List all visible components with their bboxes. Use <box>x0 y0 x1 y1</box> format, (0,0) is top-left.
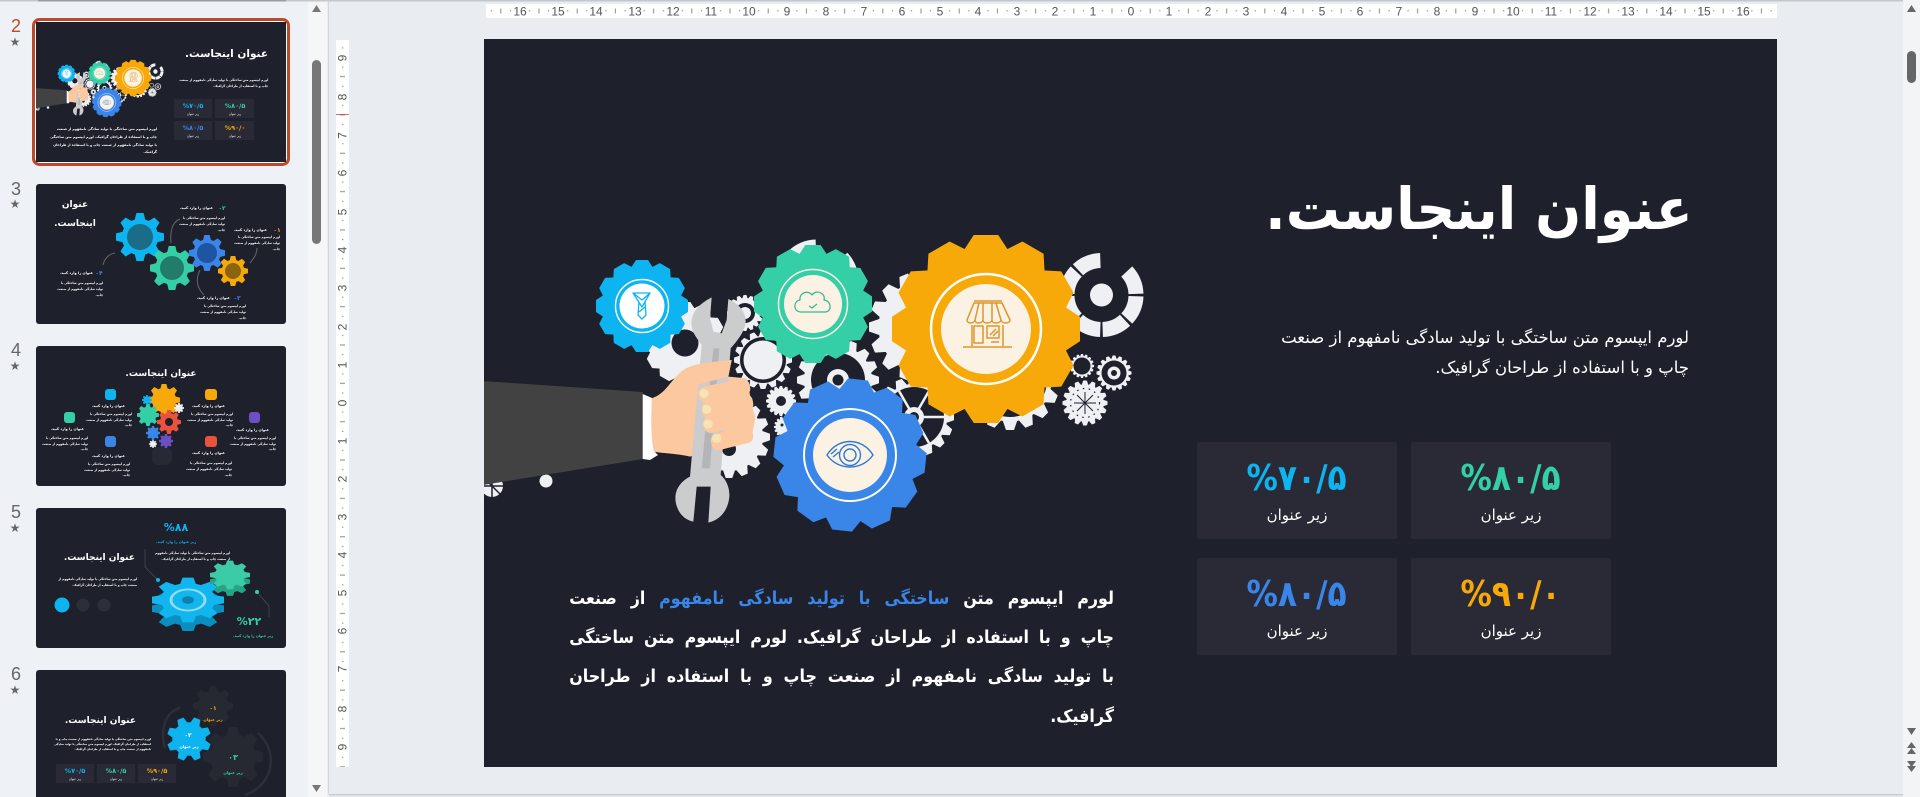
thumbnail: slide 4: عنوان را وارد کنید.‏ <box>92 404 126 408</box>
thumbnail: slide 4: تولید سادگی نامفهوم از صنعت <box>187 418 233 422</box>
thumbnail: slide 6: ۰۱ <box>209 705 217 712</box>
thumbnail: slide 4: لورم ایپسوم متن ساختگی با <box>191 412 233 416</box>
thumbnail: slide 3: عنوان را وارد کنید.‏ <box>197 296 231 300</box>
thumbnail: slide 6: استفاده از طراحان گرافیک. لورم ایپسوم متن ساختگی با تولید سادگی <box>54 742 151 746</box>
top ruler: 4 <box>975 4 982 18</box>
white spoked gear <box>874 377 954 457</box>
left ruler: 5 <box>336 208 350 215</box>
top ruler: 14 <box>1659 4 1673 18</box>
thumbnail: slide 5: از صنعت چاپ و با استفاده از طراحان گرافیک.‏ <box>161 557 230 561</box>
star mark 2: ★ <box>10 35 20 49</box>
top ruler: 5 <box>1319 4 1326 18</box>
top ruler: 6 <box>899 4 906 18</box>
top ruler: 12 <box>666 4 680 18</box>
thumbnail: slide 4 <box>36 346 286 486</box>
stat card: blue: زیر عنوان <box>1267 622 1327 640</box>
thumbnail: slide 6: %۷۰/۵ <box>65 767 85 775</box>
thumbnail: slide 2 selected: %۸۰/۵ <box>225 102 245 110</box>
intro paragraph <box>1281 328 1689 377</box>
small partial gear at arm <box>481 475 503 497</box>
white gear behind fingers <box>688 396 770 478</box>
thumbnail: slide 6: عنوان اینجاست.‏ <box>65 716 136 726</box>
stat card: orange <box>1411 558 1611 655</box>
star mark 5: ★ <box>10 521 20 535</box>
top ruler: 8 <box>1434 4 1441 18</box>
top ruler: 4 <box>1281 4 1288 18</box>
white dashed ring gear top right <box>1066 259 1137 331</box>
thumbnail: slide 4: عنوان را وارد کنید.‏ <box>236 428 270 432</box>
left ruler: 7 <box>336 665 350 672</box>
slide number 2: 2 <box>11 16 21 36</box>
star mark 4: ★ <box>10 359 20 373</box>
thumbnail: slide 2 selected: %۷۰/۵ <box>183 102 203 110</box>
thumbnail: slide 3: تولید سادگی نامفهوم از صنعت <box>57 287 103 291</box>
stat card: orange: زیر عنوان <box>1481 622 1541 640</box>
thumbnail: slide 5: لورم ایپسوم متن ساختگی با تولید سادگی نامفهوم <box>155 551 230 555</box>
thumbnail: slide 6: زیر عنوان <box>203 717 223 722</box>
thumbnail: slide 6: %۹۰/۵ <box>147 767 167 775</box>
thumbnail: slide 2 selected: %۹۰/۰ <box>225 124 245 132</box>
slide number 4: 4 <box>11 340 21 360</box>
thumbnail: slide 2 selected: زیر عنوان <box>187 134 200 138</box>
left ruler: 5 <box>336 589 350 596</box>
orange gear with shop icon <box>890 233 1082 425</box>
top ruler: 1 <box>1166 4 1173 18</box>
thumbnail: slide 3: چاپ.‏ <box>273 247 280 251</box>
white gear behind orange gear <box>869 271 981 383</box>
top ruler: 15 <box>551 4 565 18</box>
thumbnail: slide 5: زیر عنوان را وارد کنید.‏ <box>156 540 196 544</box>
icon: necktie <box>633 293 650 319</box>
top ruler: 9 <box>1472 4 1479 18</box>
thumbnail: slide 4: تولید سادگی نامفهوم از صنعت <box>186 467 232 471</box>
top ruler: 13 <box>628 4 642 18</box>
top ruler: 1 <box>1090 4 1097 18</box>
body text block: لورم ایپسوم متن ساختگی با تولید سادگی نامفهوم از صنعت <box>569 589 1114 609</box>
thumbnail: slide 6: زیر عنوان <box>223 770 243 775</box>
thumbnail: slide 6: زیر عنوان <box>110 777 123 781</box>
thumbnail: slide 2 selected: لورم ایپسوم متن ساختگی با تولید سادگی نامفهوم از صنعت <box>179 78 268 82</box>
thumbnail: slide 6: ۰۲ <box>184 732 192 739</box>
panel: main slide background <box>484 39 1777 767</box>
thumbnail: slide 2 selected: %۸۰/۵ <box>183 124 203 132</box>
thumbnail: slide 1 edge <box>38 0 286 2</box>
right window scrollbar <box>1907 5 1916 772</box>
white gear behind wrench <box>643 301 727 385</box>
left ruler: 6 <box>336 169 350 176</box>
body text block: چاپ و با استفاده از طراحان گرافیک. لورم ایپسوم متن ساختگی <box>569 628 1114 648</box>
title: عنوان اینجاست. <box>1266 175 1693 243</box>
stat card: green: زیر عنوان <box>1481 506 1541 524</box>
icon: cloud <box>795 292 830 312</box>
tiny dotted gear <box>774 416 796 438</box>
thumbnail: slide 6: لورم ایپسوم متن ساختگی با تولید سادگی نامفهوم از صنعت چاپ و با <box>56 737 151 741</box>
thumbnail: slide 2 selected: لورم ایپسوم متن ساختگی با تولید سادگی نامفهوم از صنعت <box>57 126 157 131</box>
thumbnail: slide 4: چاپ.‏ <box>81 447 88 451</box>
thumbnail: slide 3: ۰۴ <box>95 270 103 277</box>
star mark 3: ★ <box>10 197 20 211</box>
thumbnail: slide 2 selected: چاپ و با استفاده از طراحان گرافیک. لورم ایپسوم متن ساختگی <box>50 134 158 139</box>
left ruler: 4 <box>336 551 350 558</box>
white gear with hub <box>797 339 879 421</box>
top ruler: 3 <box>1243 4 1250 18</box>
thumbnail: slide 6: %۸۰/۵ <box>106 767 126 775</box>
thumbnail: slide 3: تولید سادگی نامفهوم از صنعت <box>200 310 246 314</box>
thumbnail: slide 4: تولید سادگی نامفهوم از صنعت <box>230 442 276 446</box>
thumbnail: slide 2 selected: زیر عنوان <box>229 134 242 138</box>
top ruler: 10 <box>1506 4 1520 18</box>
thumbnail: slide 6: ۰۳ <box>228 753 238 762</box>
thumbnail: slide 3: چاپ.‏ <box>239 316 246 320</box>
thumbnail: slide 3: تولید سادگی نامفهوم از صنعت <box>179 222 225 226</box>
intro paragraph: لورم ایپسوم متن ساختگی با تولید سادگی نامفهوم از صنعت <box>1281 328 1689 347</box>
left ruler: 1 <box>336 361 350 368</box>
top ruler: 2 <box>1052 4 1059 18</box>
tiny white gear <box>766 386 796 416</box>
thumbnail: slide 4: چاپ.‏ <box>123 473 130 477</box>
slide number 3: 3 <box>11 179 21 199</box>
hand palm <box>651 360 755 457</box>
thumbnail: slide 2 selected: زیر عنوان <box>187 112 200 116</box>
thumbnail: slide 3: لورم ایپسوم متن ساختگی با <box>61 281 103 285</box>
left ruler: 2 <box>336 475 350 482</box>
top ruler: 10 <box>742 4 756 18</box>
shirt cuff <box>643 394 658 460</box>
left ruler: 6 <box>336 627 350 634</box>
thumbnail: slide 5 <box>36 508 286 648</box>
top ruler: 5 <box>937 4 944 18</box>
thumbnail: slide 3: لورم ایپسوم متن ساختگی با <box>238 235 280 239</box>
top ruler: 7 <box>861 4 868 18</box>
thumbnail: slide 2 selected: چاپ و با استفاده از طراحان گرافیک.‏ <box>213 84 268 88</box>
thumbnail: slide 4: تولید سادگی نامفهوم از صنعت <box>86 418 132 422</box>
thumbnail: slide 2 selected: با تولید سادگی نامفهوم از صنعت چاپ و با استفاده از طراحان <box>53 142 157 147</box>
stat card: green: %۸۰/۵ <box>1461 458 1561 499</box>
thumbnail: slide 5: عنوان اینجاست.‏ <box>64 553 135 563</box>
thumbnail: slide 3: لورم ایپسوم متن ساختگی با <box>204 304 246 308</box>
stat card: blue <box>1197 558 1397 655</box>
thumbnail: slide 5: %۲۲ <box>237 615 262 628</box>
thumbnail: slide 4: لورم ایپسوم متن ساختگی با <box>90 412 132 416</box>
top ruler: 14 <box>589 4 603 18</box>
icon: eye <box>827 442 873 467</box>
thumbnail: slide 3: عنوان را وارد کنید.‏ <box>60 271 94 275</box>
left ruler: 4 <box>336 246 350 253</box>
body text block <box>569 588 1114 727</box>
thumbnail: slide 3: تولید سادگی نامفهوم از صنعت <box>234 241 280 245</box>
small spoked gear <box>1062 380 1108 426</box>
top ruler: 3 <box>1014 4 1021 18</box>
top ruler: 7 <box>1396 4 1403 18</box>
thumbnail: slide 4: تولید سادگی نامفهوم از صنعت <box>42 442 88 446</box>
slide number 6: 6 <box>11 664 21 684</box>
suit sleeve <box>483 381 643 485</box>
left ruler: 3 <box>336 513 350 520</box>
stat card: cyan: %۷۰/۵ <box>1247 458 1347 499</box>
thumbnail: slide 4: چاپ.‏ <box>226 423 233 427</box>
thumbnail: slide 3: ۰۲ <box>218 205 226 212</box>
small white dot <box>540 474 552 488</box>
thumbnail: slide 6 <box>36 670 286 797</box>
thumbnail: slide 3: ۰۳ <box>233 295 241 302</box>
small hub gear <box>1096 356 1132 390</box>
left ruler: 9 <box>336 54 350 61</box>
top ruler <box>486 4 1777 18</box>
white gear below orange gear <box>960 330 1060 430</box>
small ring gear <box>1070 354 1094 378</box>
left ruler <box>336 40 350 767</box>
thumbnail: slide 2 selected: زیر عنوان <box>229 112 242 116</box>
body text block: گرافیک. <box>1050 707 1114 727</box>
top ruler: 8 <box>823 4 830 18</box>
thumbnail: slide 4: لورم ایپسوم متن ساختگی با <box>234 436 276 440</box>
wrench <box>675 297 746 523</box>
thumbnail: slide 4: عنوان را وارد کنید.‏ <box>51 427 85 431</box>
left ruler: 9 <box>336 743 350 750</box>
thumbnail: slide 5: زیر عنوان را وارد کنید.‏ <box>233 634 273 638</box>
top ruler: 16 <box>1736 4 1750 18</box>
thumbnail: slide 4: لورم ایپسوم متن ساختگی با <box>88 462 130 466</box>
thumbnail: slide 4: چاپ.‏ <box>125 423 132 427</box>
thumbnail: slide 4: عنوان را وارد کنید.‏ <box>92 454 126 458</box>
thumbnail: slide 3: چاپ.‏ <box>218 228 225 232</box>
green gear with cloud icon <box>753 244 873 364</box>
left ruler: 3 <box>336 284 350 291</box>
thumbnail: slide 6: زیر عنوان <box>179 744 199 749</box>
stat card: blue: %۸۰/۵ <box>1247 574 1347 615</box>
illustration: hand holding wrench with gears <box>481 233 1137 540</box>
left ruler: 1 <box>336 437 350 444</box>
top ruler: 11 <box>1545 4 1558 18</box>
thumbnail: slide 4: عنوان را وارد کنید.‏ <box>192 404 226 408</box>
thumbnail: slide 5: %۸۸ <box>164 521 189 534</box>
thumbnail: slide 3: لورم ایپسوم متن ساختگی با <box>183 216 225 220</box>
small gear above hand <box>727 295 763 331</box>
thumbnail: slide 4: عنوان را وارد کنید.‏ <box>192 451 226 455</box>
blue gear with eye icon <box>765 370 935 540</box>
top ruler: 12 <box>1583 4 1597 18</box>
thumbnail: slide 6: نامفهوم از صنعت چاپ و با استفاده از طراحان گرافیک.‏ <box>74 747 151 751</box>
top ruler: 13 <box>1621 4 1635 18</box>
top ruler: 6 <box>1357 4 1364 18</box>
top ruler: 15 <box>1697 4 1711 18</box>
top ruler: 2 <box>1205 4 1212 18</box>
slide number 5: 5 <box>11 502 21 522</box>
left ruler: 0 <box>336 399 350 406</box>
thumbnail: slide 3: ۰۱ <box>273 227 281 234</box>
thumbnail: slide 5: لورم ایپسوم متن ساختگی با تولید سادگی نامفهوم از <box>57 577 137 581</box>
left ruler: 8 <box>336 93 350 100</box>
left panel scrollbar <box>312 5 321 792</box>
star mark 6: ★ <box>10 683 20 697</box>
thumbnail: slide 4: لورم ایپسوم متن ساختگی با <box>46 436 88 440</box>
thumb and fingers <box>687 360 756 452</box>
thumbnail: slide 5: صنعت چاپ و با استفاده از طراحان گرافیک.‏ <box>72 583 137 587</box>
top ruler: 9 <box>784 4 791 18</box>
intro paragraph: چاپ و با استفاده از طراحان گرافیک. <box>1435 358 1689 377</box>
thumbnail: slide 4: لورم ایپسوم متن ساختگی با <box>190 461 232 465</box>
thumbnail: slide 2 selected: گرافیک.‏ <box>143 149 157 154</box>
stat card: orange: %۹۰/۰ <box>1461 574 1561 615</box>
thumbnail: slide 3: اینجاست.‏ <box>54 219 96 229</box>
left ruler: 7 <box>336 132 350 139</box>
thumbnail: slide 3: عنوان را وارد کنید.‏ <box>234 228 268 232</box>
thumbnail: slide 4: چاپ.‏ <box>269 447 276 451</box>
stat card: green <box>1411 442 1611 539</box>
thumbnail: slide 4: عنوان اینجاست.‏ <box>125 369 197 379</box>
top ruler: 0 <box>1128 4 1135 18</box>
top ruler: 11 <box>705 4 718 18</box>
thumbnail: slide 4: چاپ.‏ <box>225 473 232 477</box>
left ruler: 8 <box>336 705 350 712</box>
white dashed ring behind green gear <box>782 246 852 316</box>
cyan gear with tie icon <box>595 259 689 353</box>
thumbnail: slide 6: زیر عنوان <box>69 777 82 781</box>
stat card: cyan: زیر عنوان <box>1267 506 1327 524</box>
thumbnail: slide 6: زیر عنوان <box>151 777 164 781</box>
thumbnail: slide 3: عنوان <box>62 200 88 210</box>
stat card: cyan <box>1197 442 1397 539</box>
ringed white gear <box>734 331 792 389</box>
thumbnail: slide 3: چاپ.‏ <box>96 293 103 297</box>
thumbnail: slide 3: عنوان را وارد کنید.‏ <box>180 206 214 210</box>
thumbnail: slide 2 selected <box>34 20 288 164</box>
icon: shop <box>963 301 1012 347</box>
thumbnail: slide 4: تولید سادگی نامفهوم از صنعت <box>84 468 130 472</box>
top ruler: 16 <box>513 4 527 18</box>
thumbnail: slide 3 <box>36 184 286 324</box>
left ruler: 2 <box>336 323 350 330</box>
body text block: با تولید سادگی نامفهوم از صنعت چاپ و با استفاده از طراحان <box>569 667 1114 687</box>
thumbnail: slide 2 selected: عنوان اینجاست.‏ <box>185 48 268 60</box>
